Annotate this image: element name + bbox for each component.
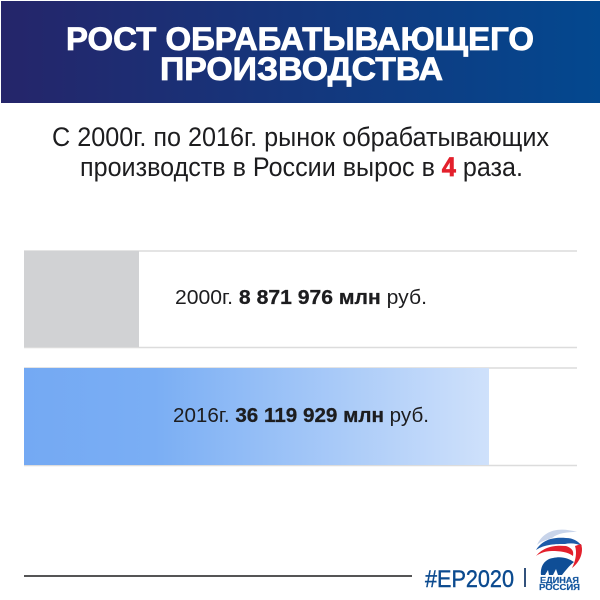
header banner (1, 1, 600, 103)
subtitle text: производств в России вырос в 4 раза. (80, 152, 528, 182)
label 2000: 2000г. 8 871 976 млн руб. (175, 287, 427, 309)
logo wordmark: ЕДИНАЯ (540, 576, 579, 585)
label 2016: 2016г. 36 119 929 млн руб. (173, 405, 429, 427)
hashtag: #ЕР2020 (425, 566, 514, 593)
logo: Единая Россия (536, 530, 582, 592)
title: ПРОИЗВОДСТВА (160, 51, 443, 87)
bar: 2000 (24, 251, 577, 348)
subtitle text: С 2000г. по 2016г. рынок обрабатывающих (52, 122, 549, 152)
footer rule (24, 575, 412, 577)
separator (524, 568, 526, 587)
logo wordmark: РОССИЯ (539, 583, 580, 592)
bar: 2016 (24, 368, 577, 466)
title: РОСТ ОБРАБАТЫВАЮЩЕГО (66, 21, 534, 57)
